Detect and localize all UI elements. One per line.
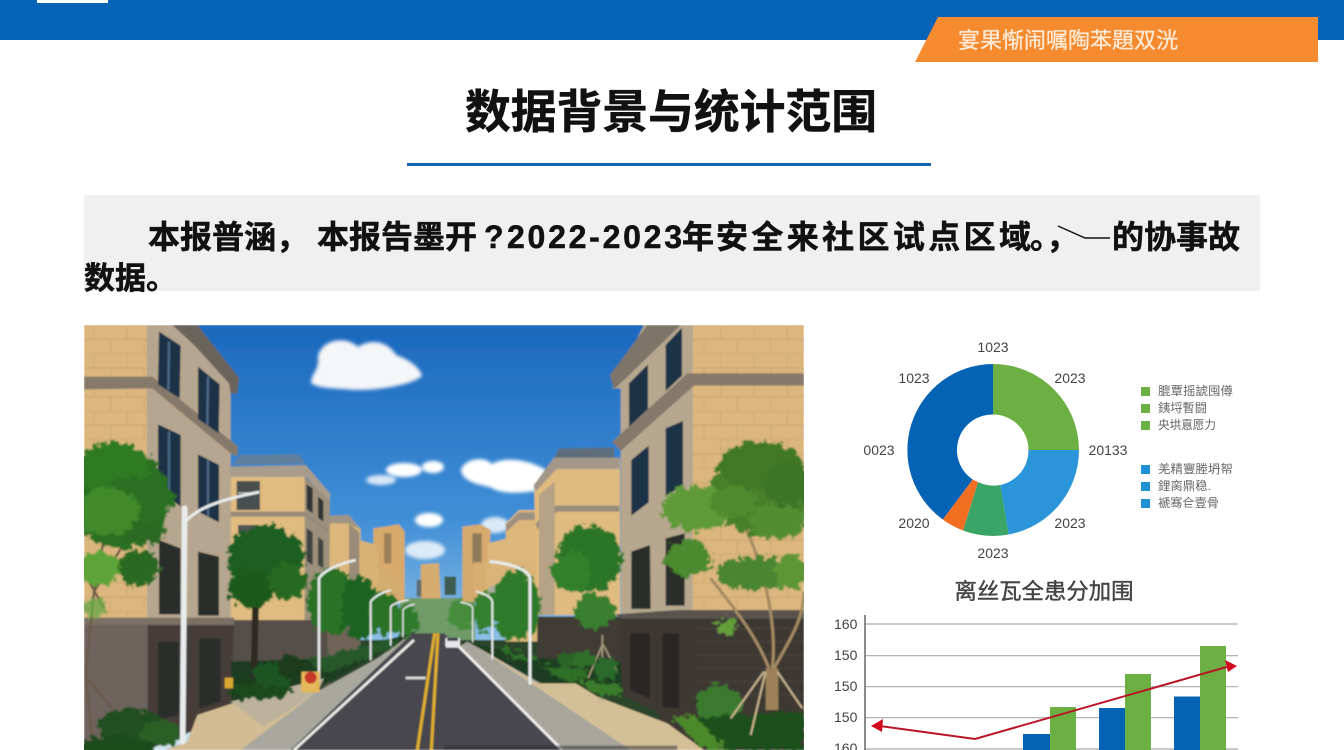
street photo <box>71 325 811 750</box>
intro text: 年 <box>682 219 714 255</box>
clouds <box>311 340 546 559</box>
street lamps <box>183 492 530 742</box>
intro text: 本报告墨开 <box>317 219 477 255</box>
intro text: 本报普涵， <box>148 219 308 255</box>
intro text: ? <box>484 219 504 255</box>
donut labels <box>863 339 1128 561</box>
intro text: 安全来社区试点区域 <box>716 219 1031 255</box>
y axis labels: 150 <box>834 678 858 694</box>
chart title: 离丝瓦全患分加围 <box>954 579 1134 604</box>
donut chart <box>863 339 1128 561</box>
donut labels: 20133 <box>1089 442 1128 458</box>
slice: blue <box>907 364 993 520</box>
slice: orange <box>943 480 978 530</box>
bars <box>1023 646 1226 750</box>
road sign <box>225 672 320 692</box>
donut labels: 1023 <box>898 370 930 386</box>
intro text: 数据 <box>84 261 146 296</box>
donut legend: 褫骞仺壹骨 <box>1158 495 1219 510</box>
intro text: 的协事故 <box>1112 219 1240 255</box>
y axis labels: 160 <box>834 616 858 632</box>
donut labels: 2020 <box>898 515 930 531</box>
distant car <box>445 638 460 648</box>
slice: light blue <box>1000 450 1079 534</box>
roadside backdrop <box>200 640 680 750</box>
logo tab <box>37 0 108 3</box>
y axis labels: 150 <box>834 709 858 725</box>
orange header tag: 宴果惭闹嘱陶苯題双洸 <box>958 28 1178 53</box>
donut legend: 銕埒暫闘 <box>1158 400 1207 415</box>
right buildings <box>445 325 804 750</box>
donut legend: 羌精寷塍坍帤 <box>1158 461 1233 476</box>
slice: teal green <box>963 482 1009 536</box>
right trees <box>447 442 811 750</box>
donut legend: 鋰脔鼎稳. <box>1158 478 1211 493</box>
bar and line chart <box>834 615 1238 750</box>
donut labels: 2023 <box>977 545 1009 561</box>
distant greenery <box>400 598 475 643</box>
intro text: 。， <box>1030 219 1078 255</box>
donut labels: 2023 <box>1054 370 1086 386</box>
donut legend: 膍覃摇諕囤僔 <box>1158 383 1233 398</box>
intro text panel <box>84 195 1260 296</box>
intro text: 。 <box>146 261 177 296</box>
donut legend <box>1141 383 1233 510</box>
y axis labels: 150 <box>834 647 858 663</box>
donut labels: 1023 <box>977 339 1009 355</box>
trend line <box>871 660 1237 739</box>
intro text <box>84 219 1240 296</box>
title underline <box>407 163 931 166</box>
ground <box>164 630 704 750</box>
title: 数据背景与统计范围 <box>465 86 877 138</box>
orange header tag <box>915 17 1318 62</box>
donut legend: 央垬慐愿力 <box>1158 418 1216 432</box>
left trees <box>71 442 419 750</box>
slice: green <box>993 364 1079 450</box>
intro text: 2022-2023 <box>507 219 682 255</box>
donut labels: 2023 <box>1054 515 1086 531</box>
donut labels: 0023 <box>863 442 895 458</box>
trees and hedges <box>71 442 811 750</box>
header band <box>0 0 1344 40</box>
y axis labels <box>834 616 858 750</box>
left buildings <box>84 325 441 750</box>
